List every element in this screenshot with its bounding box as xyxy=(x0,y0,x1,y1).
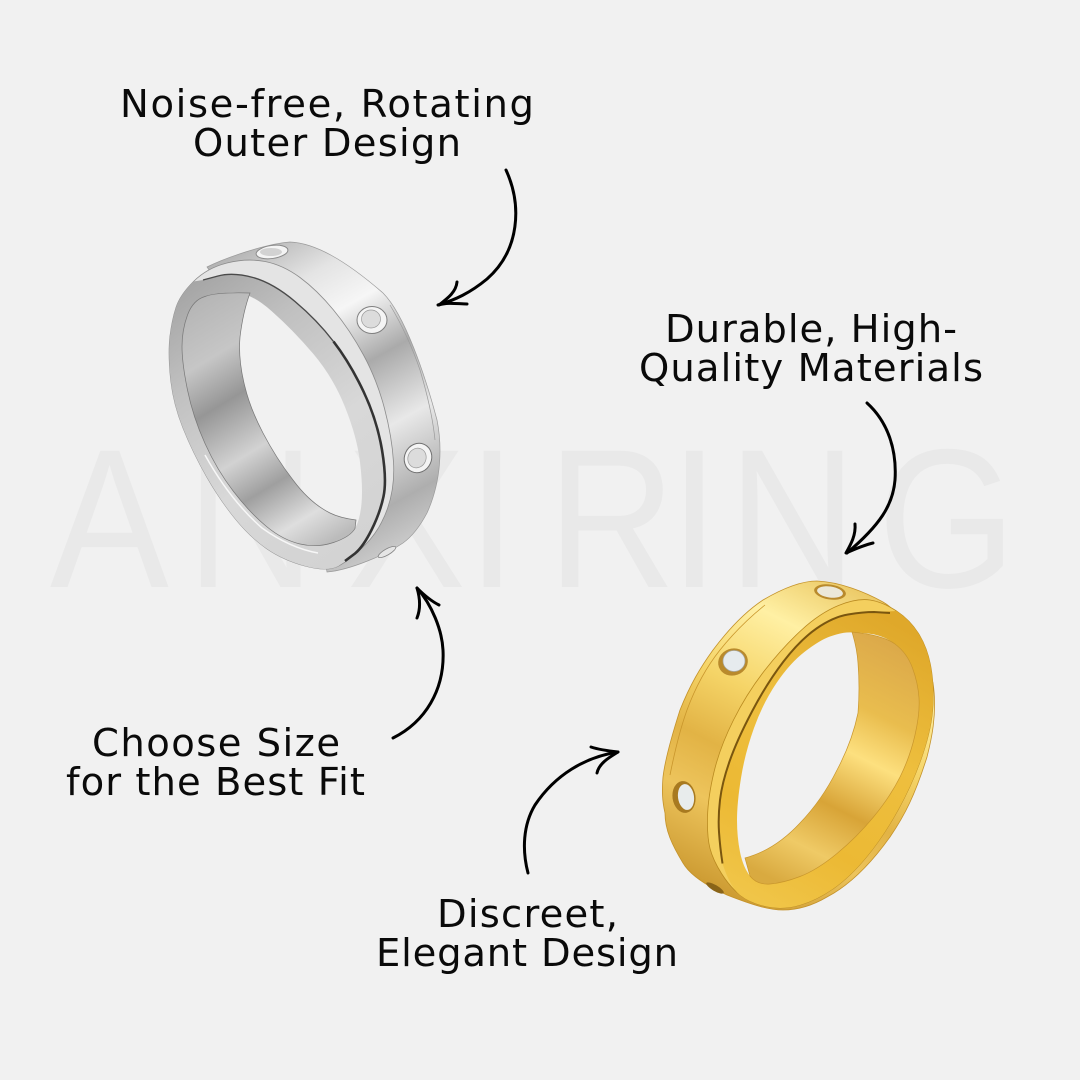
gold gem middle xyxy=(714,644,752,680)
label: discreet elegant design xyxy=(376,892,678,976)
silver ring inner surface xyxy=(182,293,356,546)
silver ring metal body xyxy=(169,242,440,572)
arrow: to silver ring top xyxy=(438,170,516,305)
silver gem top xyxy=(255,243,289,261)
label: noise-free rotating outer design: Outer Design xyxy=(193,121,461,166)
silver ring xyxy=(169,242,440,572)
arrow: to gold ring top xyxy=(846,403,895,553)
gold ring outer band xyxy=(662,581,935,910)
label: choose size for the best fit: for the Best Fit xyxy=(66,760,365,805)
gold ring band bevel xyxy=(670,605,765,775)
arrow: to silver ring bottom xyxy=(393,588,443,738)
label: durable high-quality materials xyxy=(639,307,983,391)
gold ring xyxy=(662,581,935,910)
label: discreet elegant design: Discreet, xyxy=(437,892,618,937)
silver gem middle xyxy=(357,306,387,334)
label: durable high-quality materials: Durable, High- xyxy=(665,307,957,352)
gold gem bottom sliver xyxy=(705,880,725,896)
gold ring step lip xyxy=(707,600,933,908)
silver ring groove upper xyxy=(203,274,334,342)
label: choose size for the best fit xyxy=(66,721,365,805)
silver gem bottom sliver xyxy=(377,544,397,560)
label: discreet elegant design: Elegant Design xyxy=(376,931,678,976)
silver ring step lip xyxy=(169,260,394,569)
silver ring front rim xyxy=(169,274,385,569)
gold gem top xyxy=(813,582,847,602)
label: choose size for the best fit: Choose Size xyxy=(92,721,340,766)
gold ring front rim xyxy=(719,611,933,908)
silver ring groove lower xyxy=(334,342,385,561)
watermark: ANXIRING: ANXIRING xyxy=(50,407,1016,629)
silver ring band bevel xyxy=(390,305,435,440)
gold ring groove xyxy=(719,612,890,864)
label: noise-free rotating outer design: Noise-free, Rotating xyxy=(120,82,534,127)
silver gem lower xyxy=(399,439,437,477)
label: noise-free rotating outer design xyxy=(120,82,534,166)
label: durable high-quality materials: Quality Materials xyxy=(639,346,983,391)
silver ring rim highlight xyxy=(205,455,318,553)
gold ring metal body xyxy=(662,581,935,910)
arrow: to gold ring side xyxy=(524,747,618,873)
silver ring outer band xyxy=(207,242,440,572)
gold gem lower xyxy=(670,780,698,814)
gold ring inner surface xyxy=(745,632,919,884)
